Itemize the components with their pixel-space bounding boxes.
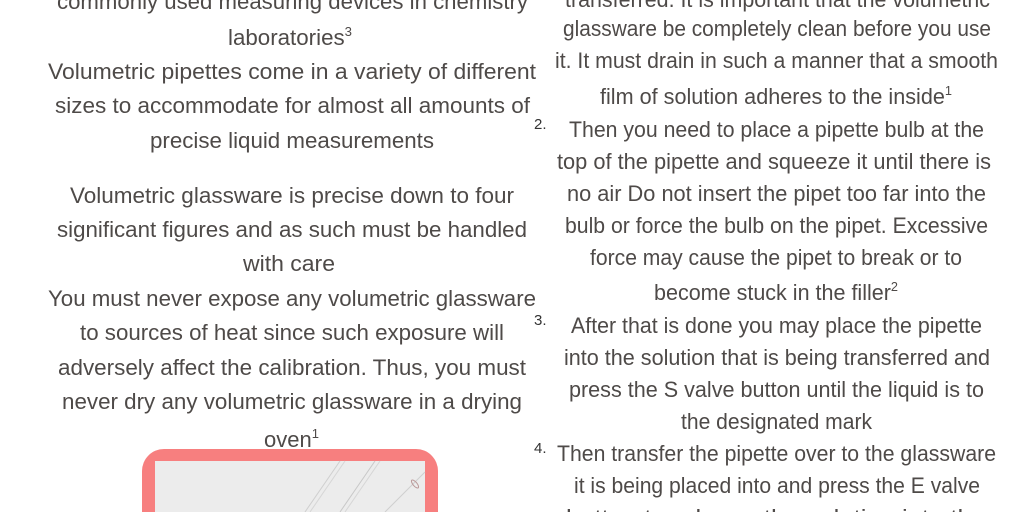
text block: left column: to sources of heat since such exposure will (80, 320, 504, 345)
text block: right column steps: into the solution that is being transferred and (564, 345, 990, 370)
text block: right column steps: 2 (891, 279, 898, 294)
text block: left column: oven (264, 427, 312, 452)
text block: left column: sizes to accommodate for almost all amounts of (55, 93, 531, 118)
text block: right column steps: press the S valve button until the liquid is to (569, 377, 984, 402)
text block: right column steps: no air Do not insert the pipet too far into the (567, 181, 986, 206)
text block: right column steps: 3. (534, 312, 547, 329)
text block: right column steps (534, 0, 998, 512)
text block: right column steps: become stuck in the filler (654, 280, 896, 305)
text block: left column: 3 (345, 24, 352, 39)
text block: right column steps: the designated mark (681, 409, 873, 434)
text block: right column steps: it is being placed into and press the E valve (574, 473, 980, 498)
text block: right column steps: 1 (945, 83, 952, 98)
text block: left column: Volumetric pipettes come in a variety of different (48, 59, 536, 84)
text block: right column steps: force may cause the pipet to break or to (590, 245, 962, 270)
text block: right column steps: 2. (534, 116, 547, 133)
text block: right column steps: After that is done you may place the pipette (571, 313, 982, 338)
photo: volumetric pipettes in pink frame (142, 449, 438, 512)
text block: right column steps: top of the pipette and squeeze it until there is (557, 149, 991, 174)
text block: left column: with care (242, 251, 335, 276)
text block: left column: Volumetric glassware is precise down to four (70, 183, 514, 208)
text block: right column steps: it. It must drain in such a manner that a smooth (555, 48, 998, 73)
text block: right column steps: bulb or force the bulb on the pipet. Excessive (565, 213, 988, 238)
text block: left column: laboratories (228, 25, 343, 50)
text block: right column steps: film of solution adheres to the inside (600, 84, 951, 109)
text block: right column steps: glassware be completely clean before you use (563, 16, 991, 41)
text block: left column: 1 (312, 426, 319, 441)
text block: right column steps: 4. (534, 440, 547, 457)
text block: left column: significant figures and as such must be handled (57, 217, 527, 242)
text block: left column: adversely affect the calibration. Thus, you must (58, 355, 526, 380)
text block: left column: precise liquid measurements (150, 128, 434, 153)
text block: left column: never dry any volumetric glassware in a drying (62, 389, 522, 414)
text block: right column steps: Then you need to place a pipette bulb at the (569, 117, 984, 142)
text block: left column (48, 0, 536, 452)
text block: right column steps: Then transfer the pipette over to the glassware (557, 441, 996, 466)
text block: left column: You must never expose any volumetric glassware (48, 286, 536, 311)
